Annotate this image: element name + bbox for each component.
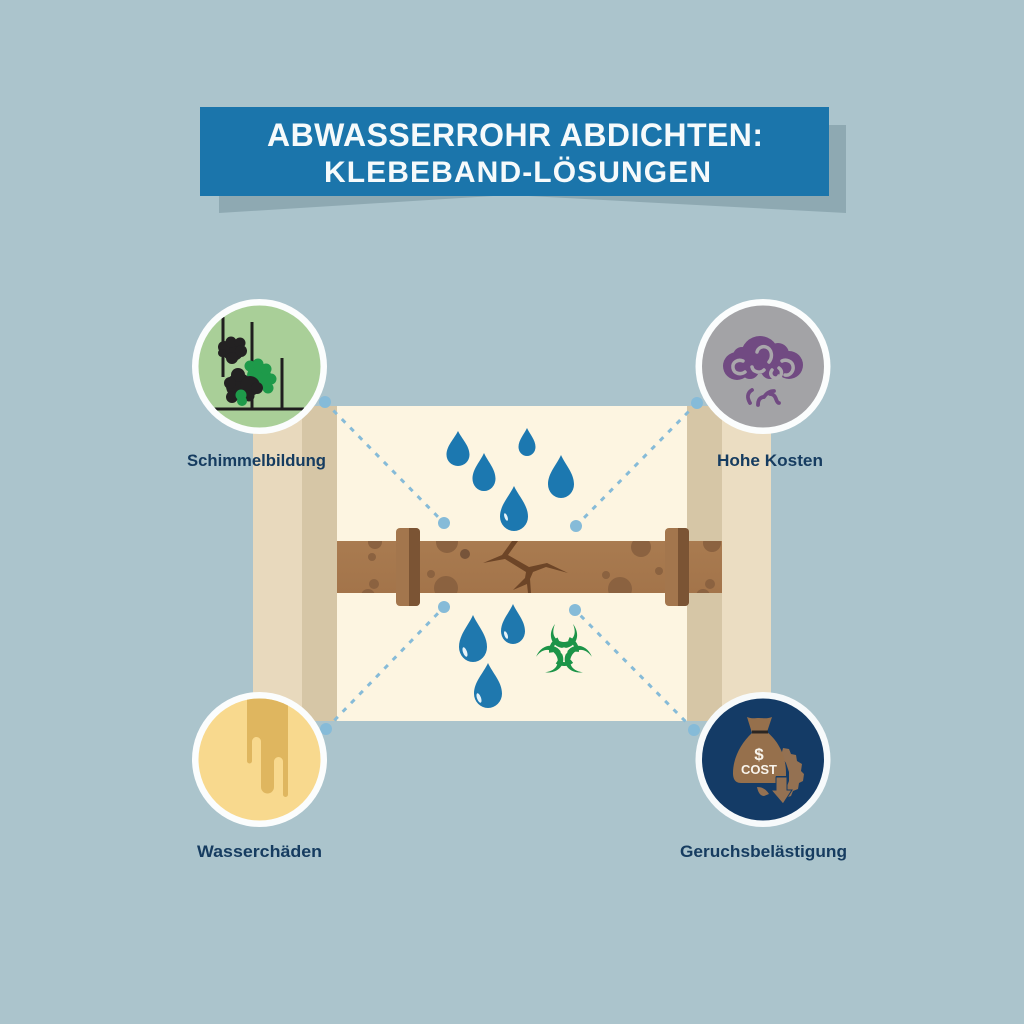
icon: mold on wall xyxy=(213,317,304,409)
title text: KLEBEBAND-LÖSUNGEN xyxy=(324,156,711,189)
icon: money bag with gear xyxy=(733,717,804,804)
icon: biohazard symbol xyxy=(534,624,594,676)
water drops above pipe xyxy=(446,428,574,531)
icon: odor cloud xyxy=(723,336,803,405)
gear xyxy=(780,748,804,798)
panel: wall section xyxy=(253,406,771,721)
title text: ABWASSERROHR ABDICHTEN: xyxy=(267,117,763,153)
title banner xyxy=(200,107,846,213)
pipe body xyxy=(337,541,722,593)
cost text: COST xyxy=(741,762,777,777)
right flange xyxy=(665,528,689,606)
dollar sign: $ xyxy=(754,745,764,764)
label: Schimmelbildung: Schimmelbildung xyxy=(187,451,326,470)
label: Wasserchäden: Wasserchäden xyxy=(197,842,322,861)
left flange xyxy=(396,528,420,606)
label: Hohe Kosten: Hohe Kosten xyxy=(717,451,823,470)
title text xyxy=(267,117,763,189)
leaking pipe xyxy=(337,528,722,606)
circle: Hohe Kosten xyxy=(696,299,830,434)
circle: Wasserchäden xyxy=(192,692,327,827)
bag xyxy=(733,717,786,783)
pipe crack xyxy=(483,541,568,593)
infographic canvas xyxy=(188,107,846,860)
connector lines xyxy=(325,402,697,730)
icon: water stain xyxy=(247,695,288,797)
label: Geruchsbelästigung: Geruchsbelästigung xyxy=(680,842,847,861)
banner background xyxy=(200,107,829,196)
water drops below pipe xyxy=(459,604,525,708)
arrow xyxy=(771,777,792,804)
connector dots xyxy=(319,396,703,736)
banner shadow xyxy=(219,125,846,213)
circle: Schimmelbildung xyxy=(192,299,327,434)
corrosion spots xyxy=(362,541,721,593)
circle: Geruchsbelästigung xyxy=(696,692,830,827)
